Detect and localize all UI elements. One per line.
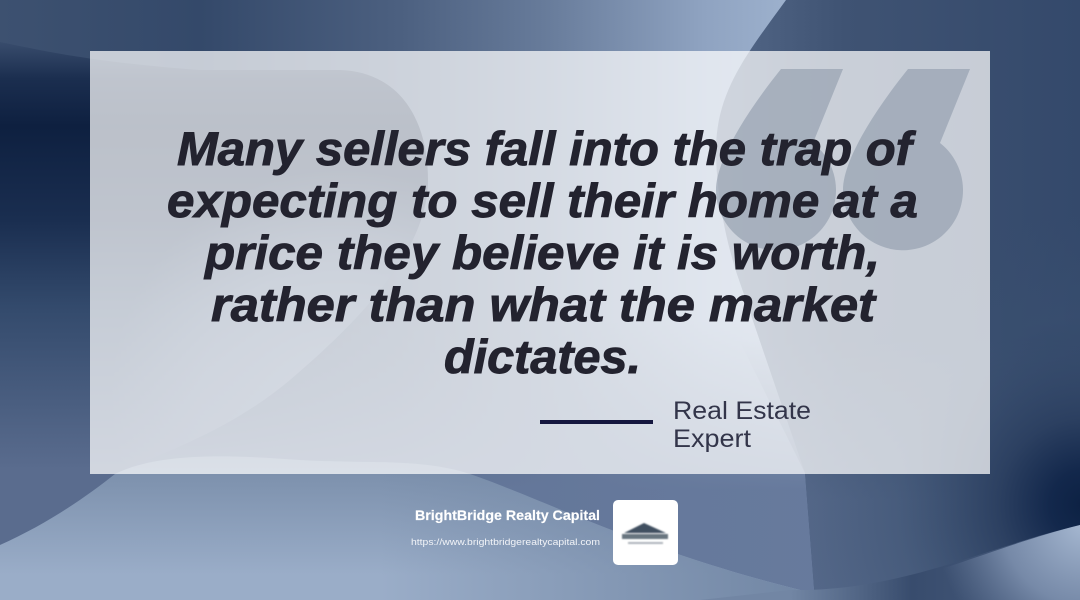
quote text: dictates. <box>444 330 641 383</box>
icon: quotation mark <box>716 69 970 250</box>
footer <box>411 500 678 565</box>
logo tile <box>613 500 678 565</box>
icon: logo roof <box>622 523 668 544</box>
quote text: Many sellers fall into the trap of <box>177 122 917 175</box>
quote text: expecting to sell their home at a <box>167 174 918 227</box>
attribution text <box>673 397 811 453</box>
company name: BrightBridge Realty Capital <box>415 507 600 523</box>
attribution rule <box>540 420 653 424</box>
website url: https://www.brightbridgerealtycapital.com <box>411 537 600 548</box>
quote text: rather than what the market <box>211 278 878 331</box>
quote text: price they believe it is worth, <box>203 226 880 279</box>
panel: quote card <box>90 51 990 474</box>
attribution text: Real Estate <box>673 397 811 425</box>
quote text <box>167 122 918 383</box>
attribution text: Expert <box>673 425 751 453</box>
